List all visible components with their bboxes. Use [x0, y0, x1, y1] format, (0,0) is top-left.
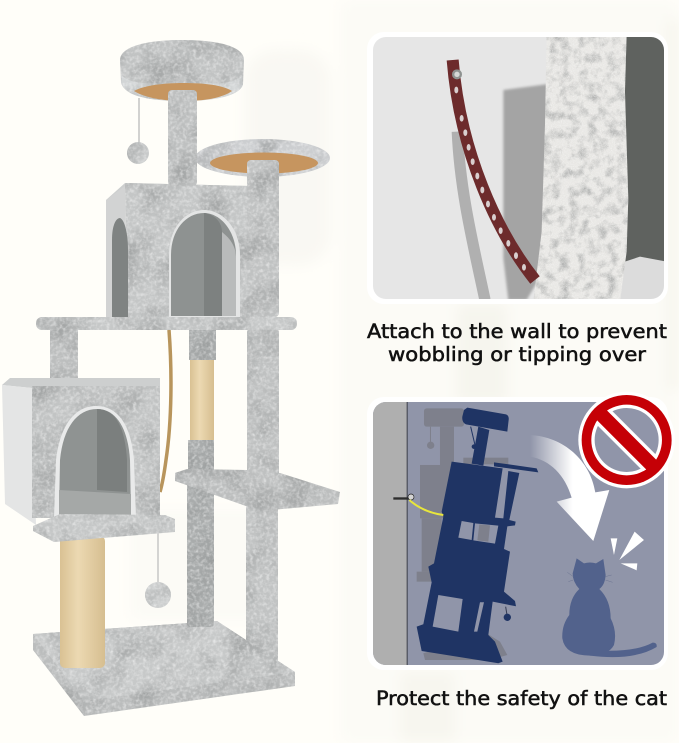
lower condo doorway	[54, 406, 136, 518]
panel: wall attachment photo	[367, 32, 668, 304]
mid shelf	[175, 469, 340, 511]
lower condo box	[2, 378, 160, 525]
tree second perch	[494, 462, 538, 472]
rear grey post	[187, 475, 214, 627]
wall strip	[373, 402, 407, 665]
strap holes	[454, 87, 526, 271]
wall screw and yellow tether	[393, 494, 443, 515]
right post lower	[246, 505, 278, 673]
sisal scratching post	[60, 536, 105, 668]
ghost upright tree	[417, 408, 508, 660]
tilted navy tree	[417, 408, 538, 663]
middle platform	[36, 317, 297, 330]
mounting strap	[453, 60, 535, 280]
right post middle	[247, 329, 279, 495]
panel: tipping illustration	[367, 392, 675, 670]
condo floor	[620, 256, 664, 299]
falling arrow	[530, 435, 609, 541]
cat tree product photo	[2, 40, 340, 716]
dark interior	[625, 37, 664, 262]
upper condo front doorway	[169, 210, 240, 317]
upper condo box	[106, 183, 250, 317]
plush fur post	[533, 35, 628, 302]
wall surface	[370, 35, 557, 302]
caption: protect the cat: Protect the safety of the cat	[376, 687, 667, 710]
hanging ball lower	[145, 532, 171, 608]
base platform	[33, 621, 295, 716]
upper condo side opening	[112, 218, 128, 317]
tree top post	[472, 427, 489, 466]
cat silhouette	[562, 558, 657, 657]
strap shadow	[457, 132, 485, 300]
left short post	[50, 329, 78, 379]
caption: attach to wall: Attach to the wall to prevent	[367, 320, 667, 343]
rear post grey middle section	[188, 440, 214, 480]
caption: attach to wall	[367, 320, 667, 366]
caption: attach to wall: wobbling or tipping over	[388, 343, 647, 366]
tree windows	[433, 521, 498, 632]
post shadow on wall	[502, 83, 546, 299]
prohibition sign	[578, 392, 675, 488]
rear post grey upper section	[189, 330, 216, 360]
tree top perch	[462, 408, 509, 432]
impact marks	[611, 532, 644, 570]
second perch platform	[195, 139, 330, 177]
tree body	[417, 462, 519, 663]
screw	[452, 69, 462, 79]
tree ball	[504, 607, 511, 621]
rear sisal post section	[190, 360, 214, 441]
lower condo shelf	[33, 514, 175, 542]
sisal rope	[160, 330, 171, 492]
top post	[168, 90, 197, 186]
top perch bed	[120, 40, 244, 101]
hanging ball upper	[127, 98, 149, 164]
upper right post	[247, 160, 279, 317]
